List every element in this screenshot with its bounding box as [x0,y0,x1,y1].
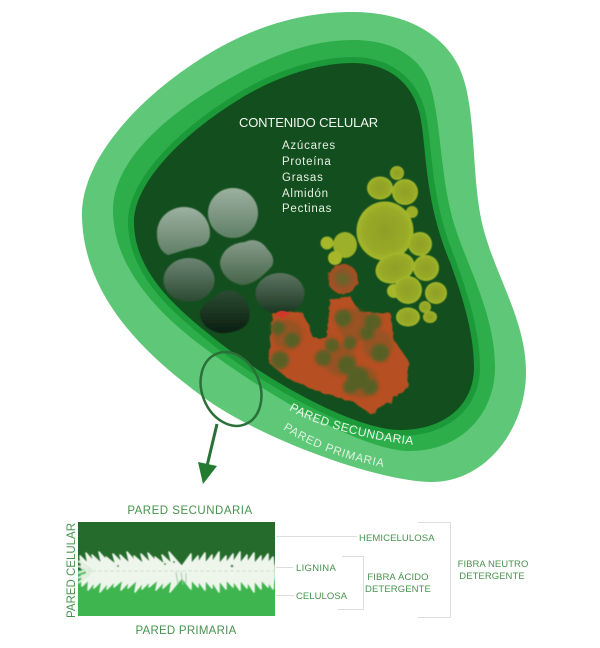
list of cell contents: Grasas [282,172,324,184]
wall label: pared primaria: PARED PRIMARIA [284,422,384,467]
dark layer [78,522,275,572]
light layer [78,570,275,616]
list of cell contents [282,140,336,215]
lignin fringe [78,552,275,592]
secondary wall [113,40,495,451]
wall detail panel [78,522,275,616]
orange organelle [268,264,408,415]
heading: pared primaria: PARED PRIMARIA [135,625,237,637]
list of cell contents: Proteína [282,156,331,168]
fringe veins [92,571,274,585]
label: fibra acido detergente: DETERGENTE [365,584,431,595]
label: celulosa: CELULOSA [296,591,348,602]
ring marker [190,343,272,435]
yellow organelles [320,166,447,326]
list of cell contents: Pectinas [282,203,332,215]
list of cell contents: Azúcares [282,140,336,152]
label: fibra acido detergente: FIBRA ÁCIDO [367,572,429,583]
label: pared celular: PARED CELULAR [66,523,78,618]
primary wall [82,12,526,482]
label: fibra neutro detergente: DETERGENTE [459,571,525,582]
label: hemicelulosa: HEMICELULOSA [359,533,435,544]
label: lignina: LIGNINA [296,563,336,574]
label: fibra neutro detergente: FIBRA NEUTRO [458,559,528,570]
leader lines and brackets [276,522,450,618]
cell interior [134,63,474,430]
cell diagram [82,12,526,482]
list of cell contents: Almidón [282,188,329,200]
wall label: pared secundaria: PARED SECUNDARIA [290,403,413,445]
heading: pared secundaria: PARED SECUNDARIA [127,505,253,517]
heading: contenido celular: CONTENIDO CELULAR [239,115,378,130]
arrow to detail [198,424,217,484]
grey organelles [157,188,304,333]
